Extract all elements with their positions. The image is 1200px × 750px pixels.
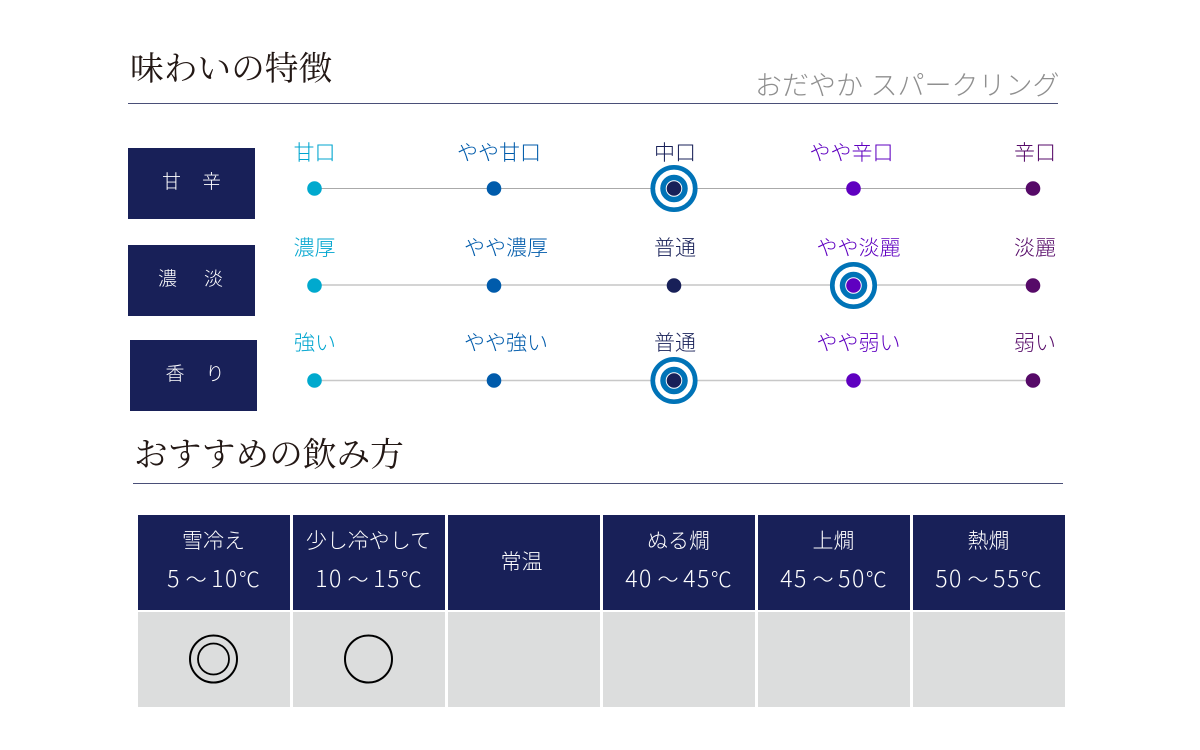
heading rule [133, 483, 1063, 484]
subtitle: wine type: おだやか スパークリング [755, 71, 1060, 101]
header: warm: 45 ～ 50℃ [780, 560, 887, 594]
cell: slightly chilled [292, 612, 444, 706]
row 3 labels [294, 332, 1056, 355]
row 3 labels: 普通 [654, 332, 696, 355]
cell: room temperature [448, 612, 600, 706]
row 2 labels [294, 237, 1056, 260]
header: hot: 50 ～ 55℃ [935, 560, 1042, 594]
row 3 labels: やや強い [464, 332, 548, 355]
header: hot [912, 514, 1064, 610]
heading: taste characteristics: 味わいの特徴 [130, 51, 332, 88]
row 2 labels: やや淡麗 [816, 237, 900, 260]
icon: single circle [344, 634, 393, 684]
heading: recommended serving: おすすめの飲み方 [134, 437, 404, 474]
label: sweetness: 甘 辛 [162, 172, 221, 192]
row 1 scale [307, 167, 1040, 210]
header: slightly chilled [292, 514, 444, 610]
header: lukewarm [602, 514, 754, 610]
header: lukewarm: 40 ～ 45℃ [625, 560, 732, 594]
table: serving temperatures [138, 515, 1065, 707]
row 2 labels: 淡麗 [1014, 237, 1056, 260]
cell: snow chilled [138, 612, 290, 706]
icon: double circle [189, 634, 238, 684]
row 2 labels: やや濃厚 [464, 237, 548, 260]
label: richness [128, 245, 255, 316]
header: hot: 熱燗 [968, 524, 1010, 554]
header: slightly chilled: 10 ～ 15℃ [315, 560, 422, 594]
label: richness: 濃 淡 [158, 269, 223, 290]
row 1 labels: 辛口 [1014, 142, 1056, 165]
row 2 labels: 普通 [654, 237, 696, 260]
row 1 labels: やや甘口 [457, 142, 541, 165]
header: warm: 上燗 [812, 524, 854, 554]
header: snow chilled: 5 ～ 10℃ [167, 560, 260, 594]
row 1 labels: 中口 [654, 142, 696, 165]
header: warm [758, 514, 910, 610]
header: room temperature: 常温 [500, 546, 542, 576]
row 3 labels: 強い [294, 332, 336, 355]
cell: lukewarm [602, 612, 754, 706]
header: snow chilled [138, 514, 290, 610]
header: room temperature panel [448, 514, 600, 610]
header: lukewarm: ぬる燗 [647, 524, 710, 554]
row 1 labels [294, 142, 1056, 165]
row 3 labels: 弱い [1014, 332, 1056, 355]
header: snow chilled: 雪冷え [182, 524, 245, 554]
row 1 labels: 甘口 [294, 142, 336, 165]
heading rule [128, 103, 1058, 104]
row 2 labels: 濃厚 [294, 237, 336, 260]
header: slightly chilled: 少し冷やして [306, 524, 431, 554]
cell: hot [912, 612, 1064, 706]
cell: warm [758, 612, 910, 706]
row 1 labels: やや辛口 [810, 142, 894, 165]
label: sweetness [128, 148, 255, 218]
row 3 labels: やや弱い [816, 332, 900, 355]
label: aroma: 香 り [165, 364, 225, 385]
row 3 scale [307, 359, 1040, 402]
row 2 scale [307, 264, 1040, 307]
label: aroma [130, 340, 257, 411]
